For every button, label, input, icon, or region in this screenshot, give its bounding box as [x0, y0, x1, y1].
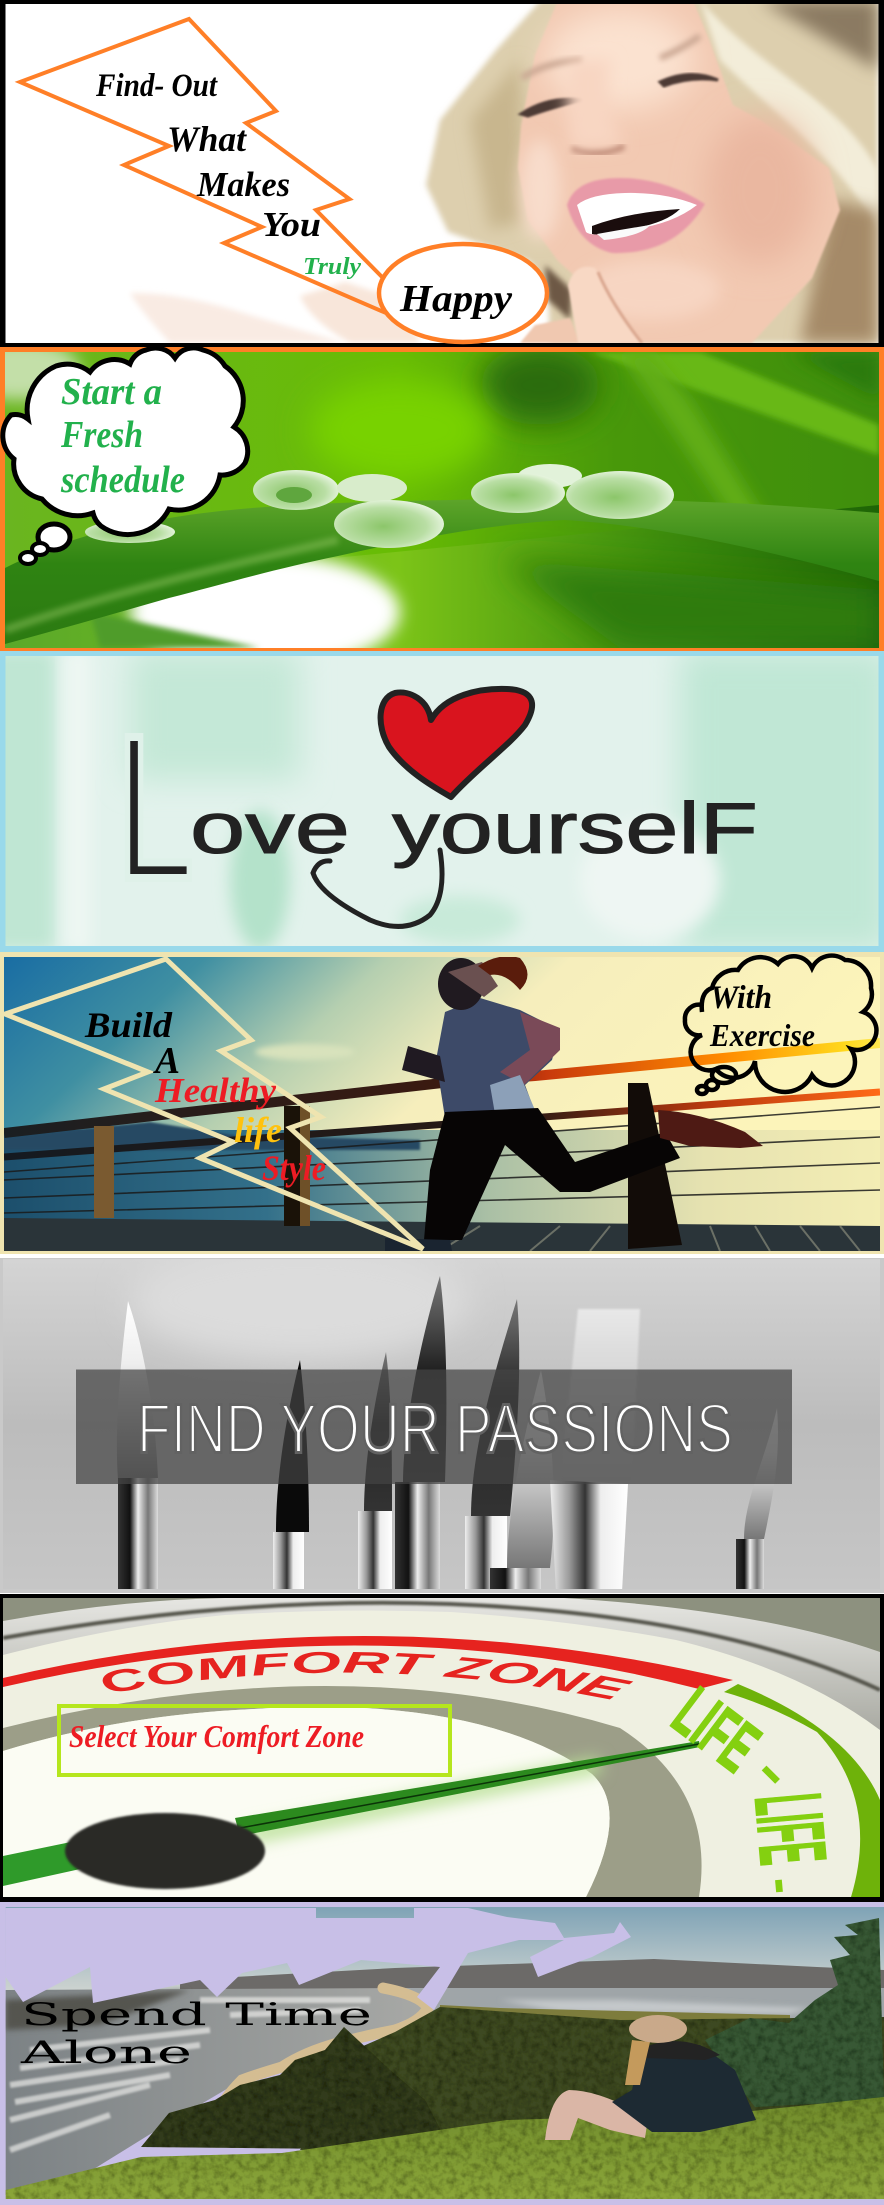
photo: woman overlooking coast: [6, 1907, 884, 2199]
text: build a healthy life style: Style: [262, 1148, 326, 1188]
posts: [94, 1126, 114, 1218]
eyes: [521, 99, 582, 116]
zigzag speech shape: [20, 19, 386, 313]
flourish: [313, 850, 442, 926]
callout box: [59, 1706, 450, 1775]
water drops: [85, 464, 674, 548]
gauge label: comfort zone: COMFORT ZONE: [102, 1652, 634, 1700]
oval: happy: [379, 244, 547, 342]
forest: [300, 2007, 884, 2150]
text: start a fresh schedule: Start a: [61, 371, 162, 413]
right trees: [705, 1918, 884, 2107]
mouth: [567, 178, 705, 253]
photo: comfort zone gauge: [3, 1598, 880, 1897]
gauge label: life: -: [748, 1747, 798, 1798]
handwritten text: love yourself: ove: [190, 789, 350, 869]
foreground tree: [141, 2027, 451, 2150]
photo: laughing woman: [130, 0, 878, 343]
text: find out what makes you truly happy: Makes: [196, 165, 290, 204]
photo: leaf with water drops: [5, 352, 879, 648]
title: spend time alone: Alone: [19, 2035, 192, 2071]
main leaf blade: [5, 499, 879, 644]
photo: runner on boardwalk: [4, 956, 880, 1251]
panel: select your comfort zone: [0, 1594, 884, 1902]
surf: [10, 2000, 370, 2150]
green arc: [724, 1684, 880, 1897]
text: build a healthy life style: Healthy: [154, 1071, 276, 1110]
grey scale band: [3, 1686, 702, 1897]
text: find out what makes you truly happy: [95, 68, 512, 320]
thought bubble: [3, 348, 248, 564]
deck: [4, 1218, 880, 1251]
handwritten text: love yourself: yourselF: [392, 789, 758, 869]
needle hub: [65, 1813, 265, 1889]
text: find out what makes you truly happy: Find- Out: [95, 68, 218, 104]
lavender brush stroke: [6, 1908, 631, 2010]
text: build a healthy life style: life: [234, 1110, 282, 1150]
zigzag speech shape: [5, 959, 423, 1249]
title: spend time alone: Spend Time: [21, 1997, 372, 2033]
icon: red heart: [381, 689, 532, 797]
text: start a fresh schedule: Fresh: [60, 414, 143, 456]
title: spend time alone: [19, 1997, 372, 2071]
gauge label: life: -: [757, 1877, 807, 1895]
text: find out what makes you truly happy: What: [167, 119, 247, 159]
runner: [385, 956, 763, 1251]
panel: find out what makes you happy: [0, 0, 884, 347]
text: find out what makes you truly happy: You: [262, 205, 321, 244]
needle glow: [250, 1765, 600, 1835]
title: find your passions: FIND YOUR PASSIONS: [137, 1390, 733, 1468]
text: select your comfort zone: Select Your Comfort Zone: [69, 1718, 364, 1754]
text: build a healthy life style: A: [153, 1040, 180, 1082]
rails: [4, 1043, 880, 1133]
panel: start a fresh schedule: [0, 340, 884, 670]
seated person: [545, 2015, 756, 2140]
text: build a healthy life style: Build: [84, 1005, 173, 1045]
panel: build a healthy life style: [0, 952, 884, 1254]
red arc: [3, 1636, 733, 1689]
text: find out what makes you truly happy: Happy: [399, 278, 512, 320]
needle: [235, 1741, 700, 1836]
gauge label: life: LIFE: [658, 1673, 774, 1787]
grass: [6, 2097, 884, 2199]
panel: spend time alone: [0, 1902, 884, 2205]
text: start a fresh schedule: [60, 371, 185, 501]
beach: [218, 1982, 434, 2098]
photo: paint brushes: [3, 1240, 880, 1593]
panel: select your comfort zone: LIFE: [734, 1790, 846, 1869]
handwritten text: love yourself: [116, 693, 758, 922]
text: with exercise: [709, 980, 815, 1053]
hand and finger: [130, 293, 345, 343]
nose: [572, 146, 624, 153]
panel: find your passions: [0, 1240, 884, 1593]
text: with exercise: With: [710, 980, 772, 1016]
gauge label: life: [658, 1673, 846, 1895]
title band: [76, 1370, 792, 1484]
handwritten text: love yourself: L: [116, 693, 194, 922]
text: with exercise: Exercise: [709, 1017, 815, 1053]
text: start a fresh schedule: schedule: [60, 459, 185, 501]
text: find out what makes you truly happy: Truly: [303, 254, 361, 280]
thought bubble: with exercise: [685, 956, 876, 1094]
text: build a healthy life style: [84, 1005, 326, 1188]
photo: watercolour paper: [0, 650, 884, 950]
panel: love yourself: [0, 650, 884, 952]
